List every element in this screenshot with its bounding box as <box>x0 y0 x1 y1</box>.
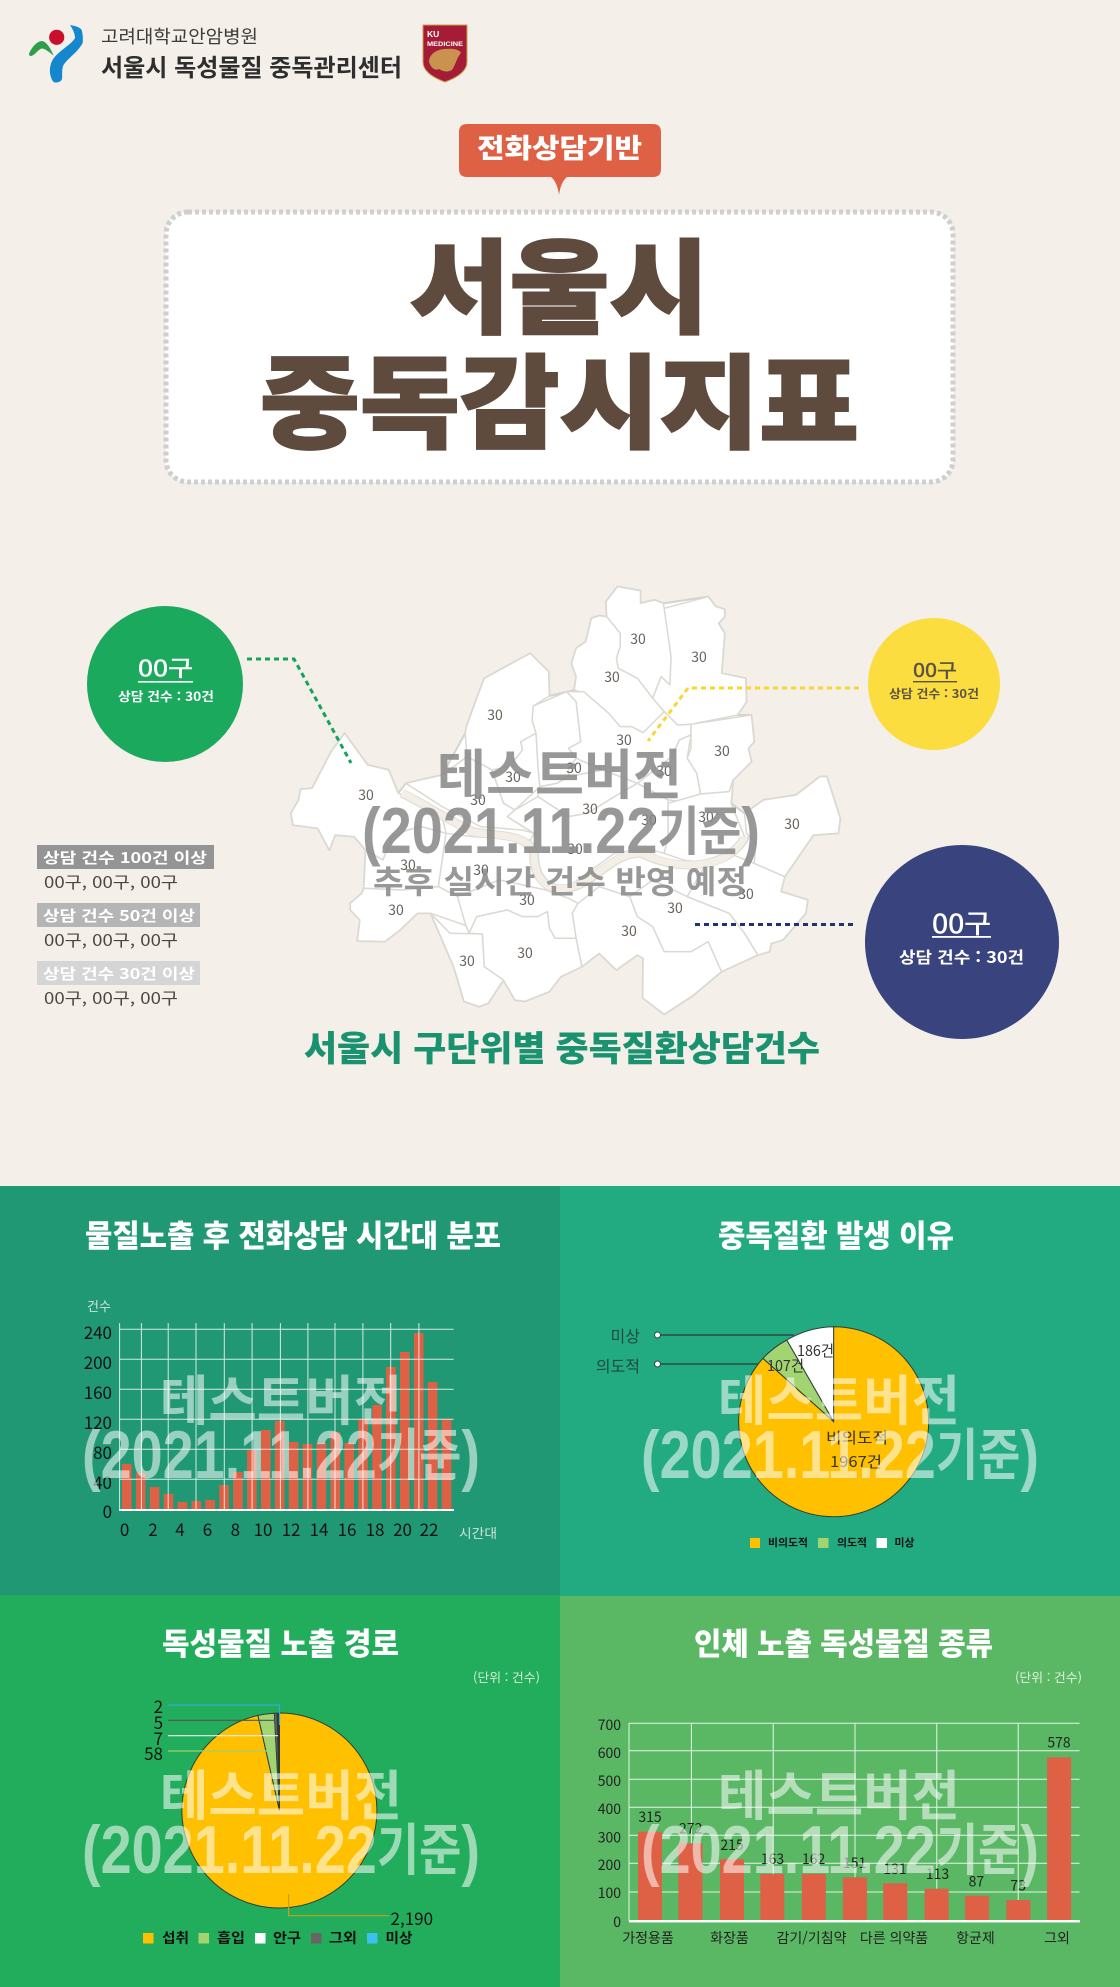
district count labels: 30 <box>487 705 503 725</box>
value labels: 7 <box>154 1725 163 1750</box>
callout labels <box>596 1323 794 1377</box>
bar chart: 10 <box>254 1516 272 1541</box>
watermark: 테스트버전 <box>718 1357 960 1436</box>
legend: consultation tiers <box>37 845 214 1009</box>
heading: 인체 노출 독성물질 종류 <box>694 1619 993 1664</box>
callout: yellow district: 상담 건수 : 30건 <box>889 685 979 702</box>
bar chart: 감기/기침약 <box>777 1928 847 1948</box>
watermark: 기준 <box>377 1411 461 1492</box>
Seoul district map <box>291 587 840 1014</box>
watermark <box>641 1752 1039 1888</box>
callout: green district: 상담 건수 : 30건 <box>118 686 214 705</box>
pie chart <box>739 1327 929 1517</box>
legend: consultation tiers: 상담 건수 100건 이상 <box>43 847 207 868</box>
bar chart: 6 <box>203 1516 212 1541</box>
bar chart: 600 <box>598 1743 621 1763</box>
bar chart: 240 <box>84 1319 112 1344</box>
bar chart: 151 <box>843 1853 866 1873</box>
arrow: green leader line <box>247 659 351 763</box>
legend: consultation tiers: 상담 건수 30건 이상 <box>43 963 195 984</box>
district count labels: 30 <box>519 890 535 910</box>
watermark <box>641 1357 1039 1493</box>
pie chart: 186건 <box>797 1340 834 1361</box>
bar chart: 578 <box>1047 1732 1071 1752</box>
heading: 독성물질 노출 경로 <box>162 1619 399 1664</box>
callout leader lines <box>168 1705 389 1916</box>
district count labels: 30 <box>691 647 707 667</box>
value labels: 2 <box>154 1693 163 1718</box>
speech bubble badge <box>459 124 661 195</box>
watermark: ) <box>1020 1812 1039 1888</box>
bar chart: 200 <box>598 1855 621 1875</box>
callout labels: 의도적 <box>596 1353 640 1377</box>
watermark: (2021.11.22 <box>641 1812 936 1888</box>
legend: 미상 <box>894 1535 915 1550</box>
legend: 비의도적 <box>768 1535 808 1550</box>
value labels: 58 <box>144 1740 163 1765</box>
heading: 물질노출 후 전화상담 시간대 분포 <box>85 1211 501 1256</box>
watermark: (2021.11.22 <box>82 1417 377 1493</box>
bar chart: 가정용품 <box>622 1928 674 1948</box>
map watermark: ) <box>741 794 760 867</box>
district count labels: 30 <box>388 900 404 920</box>
value labels: 2,190 <box>391 1905 433 1930</box>
legend: consultation tiers: 00구, 00구, 00구 <box>44 985 178 1009</box>
district count labels: 30 <box>656 761 672 781</box>
bar chart: 100 <box>598 1883 621 1903</box>
panel: hourly distribution <box>0 1186 560 1596</box>
bar chart: 80 <box>93 1439 112 1464</box>
district count labels: 30 <box>714 741 730 761</box>
bar chart: 73 <box>1010 1876 1026 1896</box>
axis label: count: 건수 <box>87 1296 111 1315</box>
district count labels: 30 <box>470 790 486 810</box>
district count labels: 30 <box>616 730 632 750</box>
panel: exposure route <box>0 1595 560 1987</box>
callout: navy district: 00구 <box>932 904 991 941</box>
pie chart <box>182 1713 377 1908</box>
district count labels: 30 <box>567 839 583 859</box>
bar chart: 8 <box>231 1516 240 1541</box>
heading: 중독질환 발생 이유 <box>718 1211 954 1256</box>
bar chart: 22 <box>420 1516 438 1541</box>
axis label: hour: 시간대 <box>459 1523 497 1542</box>
map watermark: 테스트버전 <box>437 731 682 810</box>
district count labels: 30 <box>505 767 521 787</box>
icon: KU medicine shield: MEDICINE <box>427 41 464 48</box>
watermark: ) <box>1020 1417 1039 1493</box>
bar chart: 2 <box>148 1516 158 1541</box>
pie chart: 1967건 <box>830 1451 882 1472</box>
arrow: navy leader line <box>695 923 855 926</box>
bar chart: 14 <box>310 1516 328 1541</box>
callout labels: 미상 <box>611 1323 640 1347</box>
icon: hospital emblem <box>29 25 83 83</box>
watermark: 기준 <box>936 1411 1020 1492</box>
bar chart: 162 <box>802 1849 825 1869</box>
panel: toxic substance types <box>560 1596 1120 1987</box>
district count labels: 30 <box>641 810 657 830</box>
bar chart: 12 <box>282 1516 300 1541</box>
bar chart: 다른 의약품 <box>860 1928 928 1948</box>
bar chart: 그외 <box>1044 1928 1070 1948</box>
district count labels: 30 <box>604 667 620 687</box>
district count labels: 30 <box>473 860 489 880</box>
value labels: 5 <box>154 1709 163 1734</box>
district count labels: 30 <box>698 807 714 827</box>
bar chart: 0 <box>120 1516 129 1541</box>
map watermark: 기준 <box>657 790 741 866</box>
bar chart: 0 <box>103 1498 112 1523</box>
title line 1: 서울시 <box>410 208 709 355</box>
district count labels: 30 <box>738 884 754 904</box>
bar chart: 315 <box>638 1807 662 1827</box>
bar chart: 163 <box>761 1849 784 1869</box>
district count labels: 30 <box>358 785 374 805</box>
speech bubble badge: 전화상담기반 <box>477 127 642 166</box>
legend: 안구 <box>273 1928 301 1948</box>
bar chart: 300 <box>598 1828 621 1848</box>
district count labels: 30 <box>667 898 683 918</box>
watermark: (2021.11.22 <box>82 1812 377 1888</box>
district count labels: 30 <box>784 814 800 834</box>
bar chart: 120 <box>84 1409 112 1434</box>
bar chart: 500 <box>598 1771 621 1791</box>
watermark <box>82 1357 480 1493</box>
Han river <box>402 793 745 889</box>
bar chart: 700 <box>598 1715 621 1735</box>
bar chart: 18 <box>366 1516 384 1541</box>
legend <box>143 1928 413 1948</box>
watermark: 테스트버전 <box>160 1752 402 1831</box>
district shapes <box>291 587 840 1014</box>
bar chart: 40 <box>93 1469 112 1494</box>
bar chart: 200 <box>84 1349 112 1374</box>
hospital name: 고려대학교안암병원 <box>101 23 258 49</box>
unit note: (단위 : 건수) <box>473 1667 540 1686</box>
legend <box>750 1535 915 1550</box>
district count labels: 30 <box>400 855 416 875</box>
legend: consultation tiers: 00구, 00구, 00구 <box>44 927 178 951</box>
watermark: 기준 <box>377 1806 461 1887</box>
callout: navy district: 상담 건수 : 30건 <box>899 944 1024 968</box>
legend: consultation tiers: 00구, 00구, 00구 <box>44 869 178 893</box>
bar chart: 화장품 <box>710 1928 749 1948</box>
value labels <box>144 1693 433 1930</box>
legend: 의도적 <box>837 1535 867 1550</box>
callout: navy district <box>865 845 1059 1039</box>
river inner <box>402 793 744 889</box>
watermark <box>82 1752 480 1888</box>
bar chart: 160 <box>84 1379 112 1404</box>
icon: KU medicine shield <box>423 25 467 82</box>
legend: consultation tiers: 상담 건수 50건 이상 <box>43 905 195 926</box>
legend: 흡입 <box>217 1928 245 1948</box>
legend: 미상 <box>386 1928 413 1948</box>
watermark: (2021.11.22 <box>641 1417 936 1493</box>
district count labels: 30 <box>459 951 475 971</box>
bar chart: 16 <box>338 1516 356 1541</box>
bar chart: 400 <box>598 1799 621 1819</box>
callout: yellow district: 00구 <box>913 656 957 683</box>
watermark: ) <box>461 1812 480 1888</box>
district count labels: 30 <box>582 799 598 819</box>
bar chart: 4 <box>175 1516 185 1541</box>
bar chart <box>598 1715 1080 1948</box>
map watermark <box>362 731 760 903</box>
district count labels: 30 <box>566 758 582 778</box>
callout: yellow district <box>868 618 1000 750</box>
pie chart: 107건 <box>767 1355 804 1376</box>
unit note: (단위 : 건수) <box>1015 1667 1082 1686</box>
map heading: 서울시 구단위별 중독질환상담건수 <box>304 1021 820 1072</box>
callout: green district <box>87 606 243 762</box>
bar chart: 131 <box>883 1859 907 1879</box>
bar chart: 87 <box>969 1872 984 1892</box>
bar chart: 항균제 <box>956 1928 995 1948</box>
district count labels <box>358 629 800 971</box>
center name: 서울시 독성물질 중독관리센터 <box>101 48 402 83</box>
title line 2: 중독감시지표 <box>260 323 859 470</box>
title box <box>166 208 953 482</box>
watermark: 테스트버전 <box>718 1752 960 1831</box>
bar chart: 0 <box>613 1912 621 1932</box>
district count labels: 30 <box>517 943 533 963</box>
bar chart: 20 <box>393 1516 412 1541</box>
map watermark: (2021.11.22 <box>362 794 657 867</box>
district count labels: 30 <box>621 921 637 941</box>
panel: poisoning cause <box>560 1186 1120 1596</box>
bar chart: 113 <box>926 1864 949 1884</box>
watermark: ) <box>461 1417 480 1493</box>
header logo <box>29 23 467 83</box>
watermark: 기준 <box>936 1806 1020 1887</box>
bar chart <box>84 1319 454 1541</box>
pie chart: 비의도적 <box>826 1427 888 1448</box>
legend: 그외 <box>329 1928 357 1948</box>
map watermark: 추후 실시간 건수 반영 예정 <box>373 857 747 903</box>
legend: 섭취 <box>162 1928 189 1948</box>
district count labels: 30 <box>630 629 646 649</box>
arrow: yellow leader line <box>648 688 859 741</box>
icon: KU medicine shield: KU <box>427 29 439 39</box>
bar chart: 215 <box>720 1835 744 1855</box>
bar chart: 272 <box>679 1818 703 1838</box>
watermark: 테스트버전 <box>160 1357 402 1436</box>
callout: green district: 00구 <box>138 651 193 683</box>
